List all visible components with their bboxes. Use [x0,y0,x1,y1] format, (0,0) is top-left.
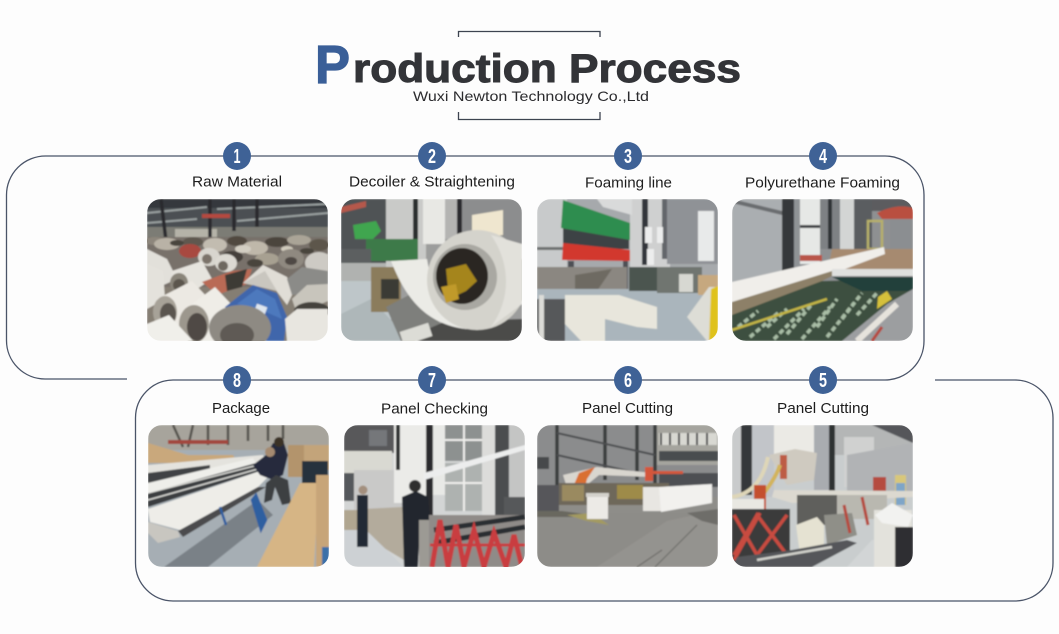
panel outline: steps 1 to 4 [6,156,924,380]
photo 5: panel cutting [732,425,913,567]
label: Panel Cutting (6): Panel Cutting [582,400,673,417]
label: Panel Cutting (5): Panel Cutting [777,400,869,417]
step 4 badge [809,142,837,170]
step 8 badge: 8 [233,370,241,392]
step 8 badge [223,366,251,394]
subtitle: Wuxi Newton Technology Co.,Ltd [413,88,649,104]
label: Foaming line: Foaming line [585,174,672,192]
photo 3: foaming line [537,199,718,341]
step 3 badge: 3 [624,146,632,168]
step 5 badge: 5 [819,370,827,392]
title bracket top [458,32,600,37]
photo 2: decoiler and straightening [341,199,527,345]
label: Package: Package [212,400,270,417]
step 6 badge: 6 [624,370,632,392]
title big letter P: P [315,35,350,95]
step 2 badge [418,142,446,170]
step 3 badge [614,142,642,170]
step 1 badge: 1 [234,146,240,168]
label: Decoiler & Straightening: Decoiler & Straightening [349,174,515,190]
label: Polyurethane Foaming: Polyurethane Foaming [745,174,900,192]
step 5 badge [809,366,837,394]
step 4 badge: 4 [819,146,828,168]
photo 6: panel cutting [537,425,718,567]
step 1 badge [223,142,251,170]
photo 1: raw material coils [147,199,328,341]
photo 4: polyurethane foaming [732,199,913,341]
step 2 badge: 2 [428,146,436,168]
panel outline: steps 5 to 8 [136,380,1053,601]
step 7 badge [418,366,446,394]
step 7 badge: 7 [428,370,436,392]
photo 8: package [148,425,329,567]
label: Panel Checking: Panel Checking [381,400,488,418]
title bracket bottom [458,112,600,120]
step 6 badge [614,366,642,394]
label: Raw Material: Raw Material [192,174,282,190]
title text: roduction Process [353,47,741,91]
photo 7: panel checking [344,425,525,567]
title block [315,32,741,120]
